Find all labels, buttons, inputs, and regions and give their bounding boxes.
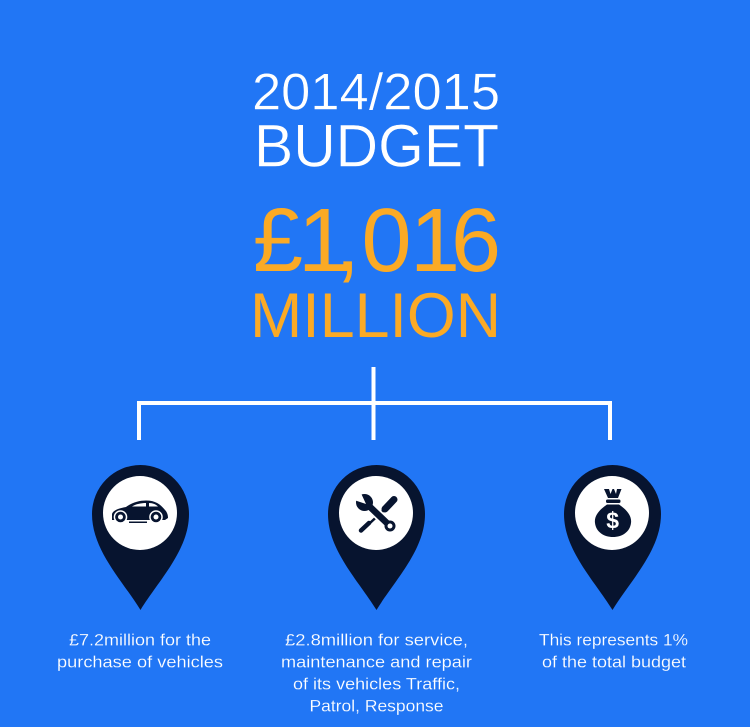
pin: vehicles (92, 465, 189, 610)
caption: service and repair (281, 632, 473, 716)
title (252, 64, 500, 180)
icon: money bag: $ (606, 508, 619, 534)
caption: service and repair: maintenance and repair (281, 654, 473, 672)
pin: share of budget (564, 465, 661, 610)
title: BUDGET (254, 112, 499, 180)
caption: share of budget: of the total budget (542, 654, 686, 672)
caption: service and repair: Patrol, Response (310, 698, 444, 716)
connector lines (139, 367, 610, 440)
caption: vehicles: £7.2million for the (69, 632, 211, 650)
budget amount (250, 191, 501, 351)
caption: share of budget (539, 632, 688, 672)
pin: service and repair (328, 465, 425, 610)
caption: vehicles (57, 632, 223, 672)
caption: service and repair: £2.8million for service, (285, 632, 468, 650)
budget amount: MILLION (250, 281, 501, 351)
caption: vehicles: purchase of vehicles (57, 654, 223, 672)
icon: car (112, 500, 168, 524)
icon: money bag (595, 489, 631, 537)
caption: share of budget: This represents 1% (539, 632, 688, 650)
budget amount: £1,016 (253, 191, 501, 291)
icon: spanner and screwdriver (351, 491, 396, 532)
title: 2014/2015 (252, 64, 500, 122)
caption: service and repair: of its vehicles Traffic, (293, 676, 460, 694)
